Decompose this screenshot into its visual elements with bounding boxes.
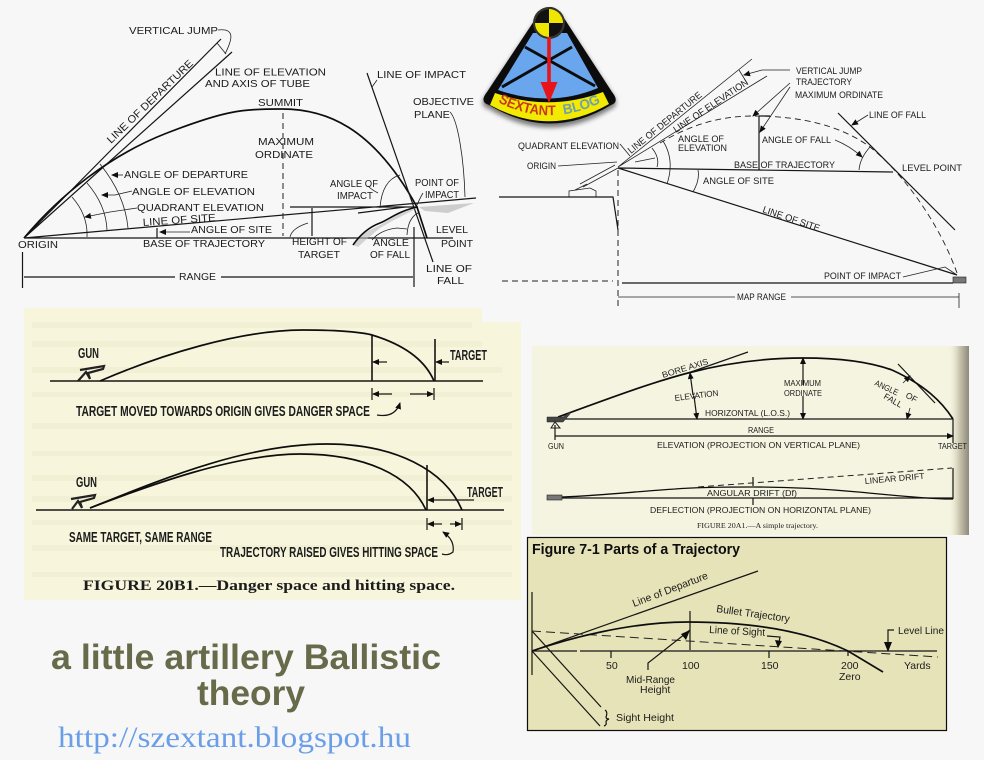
text labels: 150 — [761, 660, 779, 672]
text labels: LINE OF ELEVATION — [672, 77, 751, 135]
text labels: POINT OF — [415, 177, 459, 189]
blog URL: http://szextant.blogspot.hu — [58, 721, 411, 754]
text labels: BASE OF TRAJECTORY — [143, 238, 265, 250]
target block — [953, 277, 966, 283]
text labels: TRAJECTORY — [796, 77, 853, 88]
panel: danger space and hitting space — [24, 308, 521, 600]
blue sky behind the X — [498, 33, 598, 99]
text labels: LINE OF — [426, 263, 472, 275]
text labels: Level Line — [898, 625, 944, 637]
text labels: LINE OF DEPARTURE — [626, 90, 704, 156]
elevation diagram: FALL — [882, 391, 904, 410]
elevation diagram: GUN — [548, 441, 564, 451]
line of departure and line of elevation — [24, 30, 232, 238]
red arrow — [540, 37, 558, 103]
lower diagram: hitting space: GUN — [76, 475, 97, 491]
text labels: LINE OF FALL — [869, 110, 926, 121]
text labels: ORIGIN — [18, 239, 58, 251]
elevation diagram: HORIZONTAL (L.O.S.) — [705, 408, 790, 418]
text labels: ANGLE OF SITE — [191, 224, 272, 236]
text labels: LEVEL POINT — [902, 163, 962, 174]
yellow banner with name — [490, 92, 609, 122]
text labels: VERTICAL JUMP — [129, 25, 218, 37]
text labels: LINE OF ELEVATION — [215, 66, 326, 78]
icon: Sextant Blog badge — [480, 7, 619, 131]
text labels: LINE OF DEPARTURE — [105, 58, 196, 146]
yellow banner with name: BLOG — [562, 95, 600, 114]
deflection diagram — [547, 468, 953, 515]
text labels: FALL — [437, 275, 464, 287]
gun and ground — [499, 165, 953, 308]
base, site and impact lines — [22, 73, 476, 288]
black X bars — [502, 47, 595, 87]
lower diagram: hitting space: SAME TARGET, SAME RANGE — [69, 530, 212, 546]
deflection diagram: LINEAR DRIFT — [864, 471, 925, 486]
text labels: QUADRANT ELEVATION — [137, 202, 264, 214]
panel: classic trajectory diagram — [18, 22, 476, 292]
text labels: 50 — [606, 660, 618, 672]
elevation diagram: ANGLE — [873, 378, 900, 397]
text labels: OF FALL — [370, 249, 410, 261]
text labels: SUMMIT — [258, 97, 304, 109]
bullet trajectory — [532, 622, 883, 672]
text labels: IMPACT — [425, 189, 460, 201]
text labels: MAP RANGE — [737, 292, 786, 303]
pointer arrows and sight height brace — [604, 630, 894, 726]
text labels: ORDINATE — [255, 149, 313, 161]
text labels: RANGE — [179, 271, 216, 283]
text labels — [18, 25, 474, 287]
elevation diagram: OF — [904, 390, 919, 405]
elevation diagram: MAXIMUM — [784, 378, 821, 388]
text labels: HEIGHT OF — [292, 236, 347, 248]
map range arrow — [618, 293, 959, 308]
text labels: PLANE — [414, 109, 450, 121]
page edge shading — [948, 346, 969, 535]
yellow banner with name: SEXTANT — [499, 94, 556, 116]
deflection diagram: DEFLECTION (PROJECTION ON HORIZONTAL PLANE) — [650, 505, 871, 515]
lower diagram: hitting space: TARGET — [467, 485, 503, 501]
upper diagram: danger space: GUN — [78, 346, 99, 362]
deflection diagram: ANGULAR DRIFT (Df) — [707, 488, 797, 498]
text labels: LINE OF SITE — [142, 212, 216, 229]
departure, elevation, site and base lines — [618, 59, 957, 275]
text labels: ORIGIN — [527, 161, 556, 172]
text labels: BASE OF TRAJECTORY — [734, 160, 836, 171]
panel: Figure 7-1 parts of a trajectory — [528, 538, 946, 730]
text labels: ANGLE — [373, 237, 409, 249]
elevation diagram: ORDINATE — [784, 388, 822, 398]
dashed trajectory — [660, 116, 957, 273]
text labels: MAXIMUM ORDINATE — [795, 90, 883, 101]
text labels: OBJECTIVE — [413, 96, 474, 108]
text labels: ANGLE OF — [330, 178, 378, 190]
elevation diagram: ELEVATION — [674, 388, 719, 403]
elevation diagram — [547, 352, 967, 451]
text labels: POINT — [441, 238, 474, 250]
upper diagram: danger space: TARGET MOVED TOWARDS ORIGIN GIVES DANGER SPACE — [76, 404, 370, 420]
reference lines — [532, 571, 938, 726]
text labels — [606, 570, 944, 724]
text labels: LEVEL — [436, 224, 468, 236]
trajectory curve — [24, 109, 427, 238]
text labels: LINE OF SITE — [761, 204, 821, 234]
elevation diagram: BORE AXIS — [661, 356, 710, 380]
text labels: ELEVATION — [678, 143, 727, 154]
ground hatching — [353, 203, 474, 247]
text labels: Mid-Range — [626, 674, 675, 686]
text labels: POINT OF IMPACT — [824, 271, 901, 282]
text labels: AND AXIS OF TUBE — [205, 78, 310, 90]
panel: simple trajectory — [532, 346, 969, 535]
lower diagram: hitting space — [36, 444, 504, 561]
elevation diagram: TARGET — [938, 441, 967, 451]
text labels: LINE OF IMPACT — [377, 69, 467, 81]
text labels: ANGLE OF ELEVATION — [132, 186, 255, 198]
text labels — [518, 66, 962, 303]
title — [51, 637, 441, 713]
title: a little artillery Ballistic — [51, 637, 441, 677]
text labels: Sight Height — [616, 712, 674, 724]
text labels: ANGLE OF FALL — [762, 135, 831, 146]
crash test dummy marker — [533, 7, 565, 39]
upper diagram: danger space: TARGET — [450, 348, 487, 364]
text labels: MAXIMUM — [258, 136, 314, 148]
text labels: Yards — [904, 660, 931, 672]
text labels: IMPACT — [337, 190, 374, 202]
text labels: ANGLE OF — [678, 134, 724, 145]
text labels: Line of Sight — [709, 624, 765, 639]
text labels: 200 — [841, 660, 859, 672]
text labels: QUADRANT ELEVATION — [518, 141, 619, 152]
panel heading: Figure 7-1 Parts of a Trajectory — [532, 541, 741, 558]
upper diagram: danger space — [50, 330, 487, 420]
elevation diagram: RANGE — [748, 425, 774, 435]
text labels: Height — [640, 684, 670, 696]
title: theory — [197, 673, 305, 713]
lower diagram: hitting space: TRAJECTORY RAISED GIVES HITTING SPACE — [220, 545, 438, 561]
text labels: 100 — [682, 660, 700, 672]
text labels: ANGLE OF SITE — [703, 176, 774, 187]
figure caption: FIGURE 20A1.—A simple trajectory. — [697, 521, 818, 530]
elevation diagram: ELEVATION (PROJECTION ON VERTICAL PLANE) — [657, 440, 860, 450]
angle arcs and leaders — [558, 141, 957, 277]
faint show-through text — [32, 322, 512, 577]
text labels: Zero — [839, 671, 861, 683]
text labels: VERTICAL JUMP — [796, 66, 862, 77]
text labels: ANGLE OF DEPARTURE — [124, 169, 248, 181]
text labels: TARGET — [298, 249, 341, 261]
text labels: Bullet Trajectory — [716, 603, 791, 625]
figure caption: FIGURE 20B1.—Danger space and hitting space. — [83, 578, 455, 594]
text labels: Line of Departure — [631, 570, 710, 610]
panel: map range trajectory diagram — [496, 55, 976, 310]
